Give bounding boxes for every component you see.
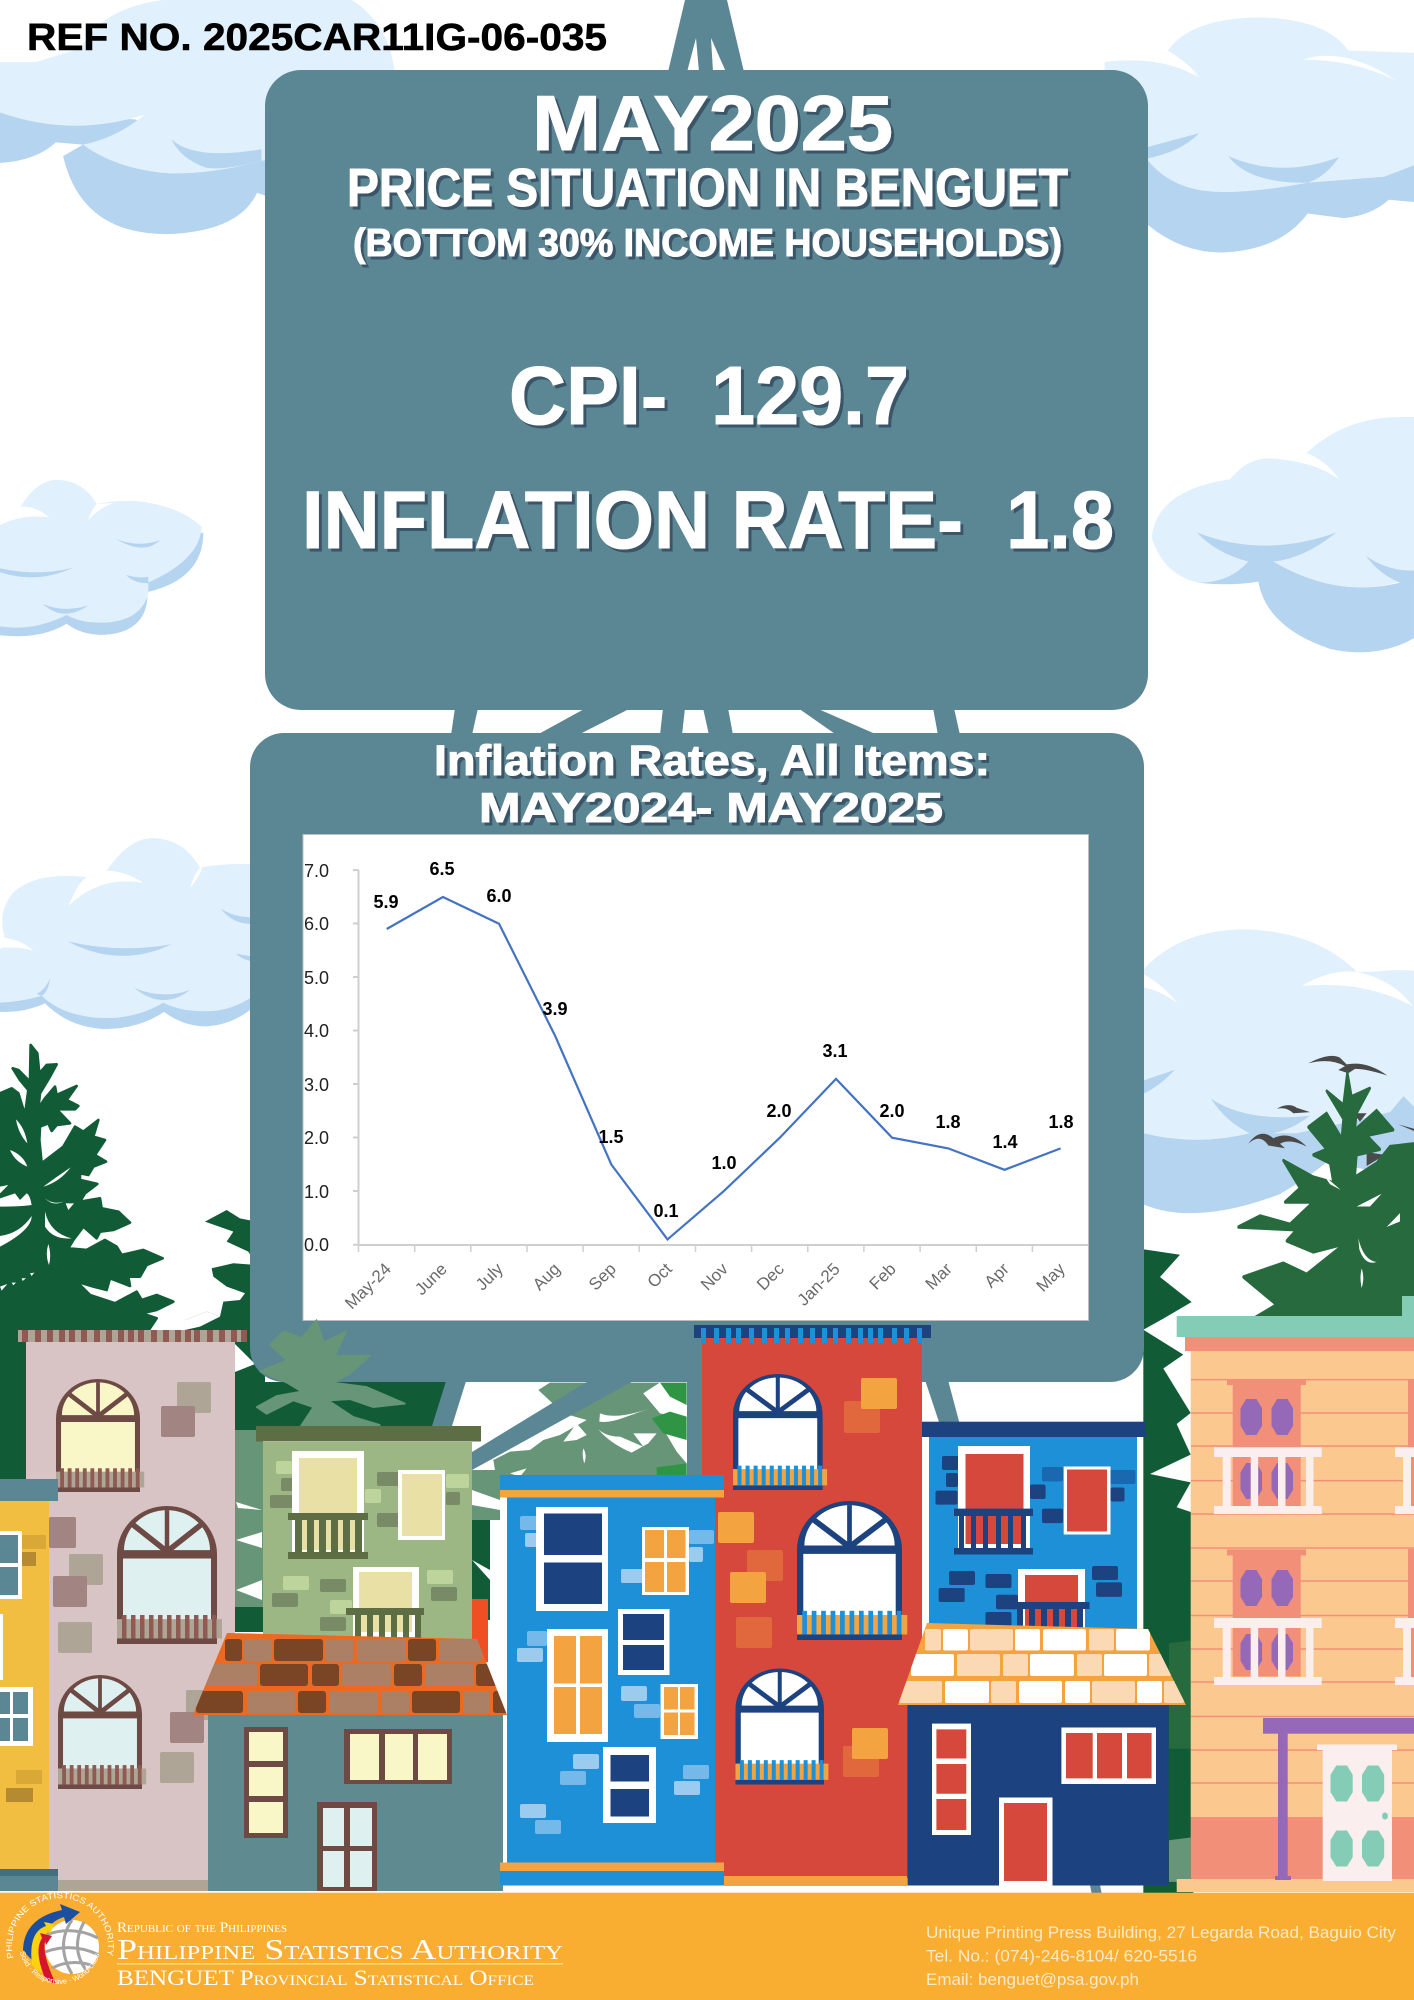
- reference number: REF NO. 2025CAR11IG-06-035: [27, 17, 607, 59]
- window: red lower: [736, 1668, 828, 1784]
- house: blue left: [500, 1475, 724, 1886]
- line chart: 1.4: [992, 1132, 1018, 1152]
- window: red upper: [733, 1374, 827, 1490]
- line chart: May: [1033, 1259, 1069, 1296]
- line chart: Sep: [585, 1259, 620, 1294]
- line chart: 5.0: [304, 968, 329, 988]
- line chart: Aug: [529, 1259, 564, 1294]
- line chart: 3.0: [304, 1075, 329, 1095]
- house: pink: [18, 1330, 247, 1891]
- contact details: Email: benguet@psa.gov.ph: [926, 1970, 1139, 1989]
- line chart: 2.0: [879, 1101, 905, 1121]
- line chart: 0.1: [653, 1201, 679, 1221]
- heading: price situation: PRICE SITUATION IN BENGUET: [347, 158, 1068, 218]
- logo motto: Solid · Responsive · World-class: [20, 1951, 100, 1984]
- line chart: 2.0: [304, 1128, 329, 1148]
- logo: Philippine Statistics Authority seal: [6, 1892, 114, 1984]
- window: pink upper: [56, 1379, 144, 1492]
- tree: left small: [185, 1210, 257, 1363]
- line chart: [303, 834, 1088, 1320]
- line chart: 2.0: [766, 1101, 792, 1121]
- line chart: 1.8: [1048, 1112, 1074, 1132]
- line chart: 6.0: [304, 914, 329, 934]
- tree: left large: [0, 1045, 173, 1480]
- chart heading line 1: Inflation Rates, All Items:: [434, 737, 990, 785]
- subheading: income group: (BOTTOM 30% INCOME HOUSEHOLDS): [353, 222, 1062, 265]
- house: peach: [1177, 1296, 1414, 1892]
- agency name: BENGUET Provincial Statistical Office: [117, 1965, 534, 1990]
- chart heading line 2: MAY2024- MAY2025: [479, 784, 943, 831]
- window: pink middle: [117, 1506, 222, 1644]
- line chart: 5.9: [373, 892, 399, 912]
- line chart: Feb: [866, 1259, 900, 1294]
- line chart: June: [411, 1259, 451, 1299]
- window: pink lower: [58, 1675, 146, 1789]
- line chart: 1.8: [935, 1112, 961, 1132]
- line chart: 1.0: [711, 1153, 737, 1173]
- line chart: Nov: [697, 1259, 732, 1294]
- house: blue right: [922, 1422, 1146, 1633]
- contact details: Unique Printing Press Building, 27 Legarda Road, Baguio City: [926, 1923, 1396, 1942]
- line chart: Dec: [753, 1259, 788, 1294]
- line chart: Jan-25: [794, 1259, 844, 1310]
- cloud: lower right: [1144, 929, 1414, 1213]
- agency name: Philippine Statistics Authority: [117, 1934, 563, 1966]
- line chart: Oct: [644, 1259, 676, 1292]
- line chart: 1.0: [304, 1182, 329, 1202]
- line chart: 3.1: [822, 1041, 848, 1061]
- contact details: Tel. No.: (074)-246-8104/ 620-5516: [926, 1946, 1197, 1966]
- line chart: 1.5: [598, 1127, 624, 1147]
- line chart: 4.0: [304, 1021, 329, 1041]
- window: red middle: [797, 1501, 907, 1640]
- line chart: July: [472, 1259, 507, 1294]
- line chart: Apr: [981, 1259, 1013, 1292]
- line chart: 6.5: [429, 859, 455, 879]
- house: teal with brick roof: [193, 1633, 509, 1891]
- stat: inflation rate: INFLATION RATE- 1.8: [302, 475, 1114, 566]
- tree: over panel: [257, 1320, 405, 1427]
- line chart: Mar: [922, 1259, 956, 1294]
- tree: far right: [1238, 1072, 1414, 1319]
- line chart: 6.0: [486, 886, 512, 906]
- cloud: middle left: [0, 480, 203, 636]
- stat: CPI: CPI- 129.7: [509, 349, 909, 442]
- cloud: top left: [0, 0, 394, 234]
- footer band: [0, 1892, 1414, 2000]
- cloud: middle right: [1152, 417, 1414, 652]
- line chart: 7.0: [304, 861, 329, 881]
- easel struts: [432, 0, 1102, 1895]
- cloud: top right: [1105, 17, 1414, 253]
- house: navy with cream roof: [898, 1623, 1186, 1886]
- line chart: 0.0: [304, 1235, 329, 1255]
- cloud: lower left: [0, 838, 253, 1029]
- panel: price situation: [265, 70, 1148, 710]
- tree: center behind struts: [430, 1383, 687, 1480]
- agency name: Republic of the Philippines: [117, 1920, 287, 1936]
- agency name: [117, 1920, 563, 1990]
- house: red: [694, 1325, 931, 1886]
- house: yellow: [0, 1479, 58, 1891]
- line chart: May-24: [341, 1259, 395, 1313]
- panel: inflation chart: [250, 733, 1144, 1382]
- tree band: behind pink and green houses: [235, 1335, 500, 1632]
- birds: [1248, 1056, 1414, 1166]
- house: green: [256, 1426, 488, 1662]
- logo ring text: PHILIPPINE STATISTICS AUTHORITY: [6, 1892, 114, 1958]
- title: month: MAY2025: [532, 79, 893, 167]
- contact details: [926, 1923, 1396, 1989]
- line chart: 3.9: [542, 999, 568, 1019]
- tree: right dark band: [1143, 1249, 1193, 1896]
